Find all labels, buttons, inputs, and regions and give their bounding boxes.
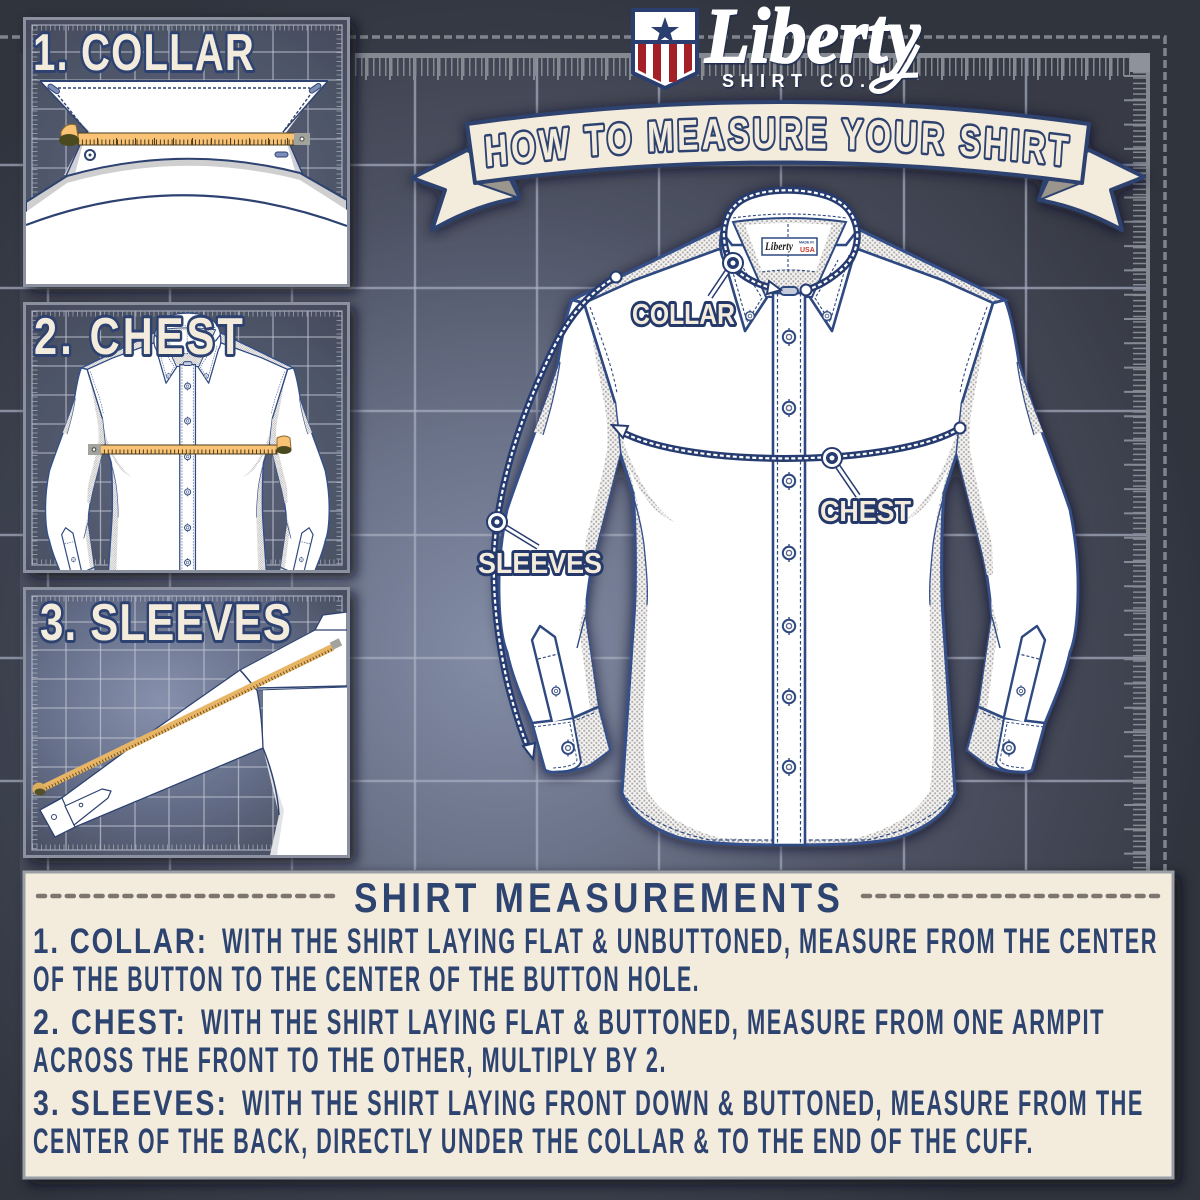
heading: SHIRT MEASUREMENTS [354,874,844,921]
panel: 3. sleeves [24,588,348,856]
instruction: collar [33,922,1158,999]
logo: Liberty Shirt Co. [633,0,920,91]
panel: 1. collar [24,18,348,286]
panel title: 1. COLLAR [33,24,255,82]
shirt illustration [499,188,1078,845]
panel: 2. chest [24,304,348,635]
label: collar: COLLAR [632,299,735,331]
icon: flag shield [633,10,697,88]
instruction: chest [33,1003,1105,1080]
shirt woven label [762,238,817,255]
logo subtitle: SHIRT CO. [722,71,865,91]
panel title: 3. SLEEVES [40,594,292,652]
banner text: HOW TO MEASURE YOUR SHIRT [484,116,1071,169]
mini shirt [44,312,330,570]
instruction: sleeves [33,1084,1144,1161]
collar illustration [26,81,347,284]
label: sleeves: SLEEVES [478,548,602,580]
shirt woven label: Liberty [764,239,794,253]
panel title: 2. CHEST [34,308,246,366]
tape measure [59,124,310,146]
shirt woven label: MADE IN [799,240,814,244]
banner: How to measure your shirt [407,92,1150,238]
panel: shirt measurements [24,872,1173,1178]
instruction: collar: OF THE BUTTON TO THE CENTER OF THE BUTTON HOLE. [33,960,700,999]
tape measure [88,436,292,455]
instruction: chest: ACROSS THE FRONT TO THE OTHER, MULTIPLY BY 2. [33,1041,667,1080]
shirt woven label: USA [800,247,815,254]
label: chest: CHEST [820,496,911,528]
measurement: collar loop [710,190,857,297]
measurement: sleeve line [487,272,622,759]
instruction: sleeves: 3. SLEEVES: [33,1084,228,1123]
instruction: collar: 1. COLLAR: [33,922,208,961]
tape measure [32,638,342,796]
sleeve illustration [40,612,347,855]
measurement: chest line [612,422,966,496]
instruction: chest: 2. CHEST: [33,1003,187,1042]
